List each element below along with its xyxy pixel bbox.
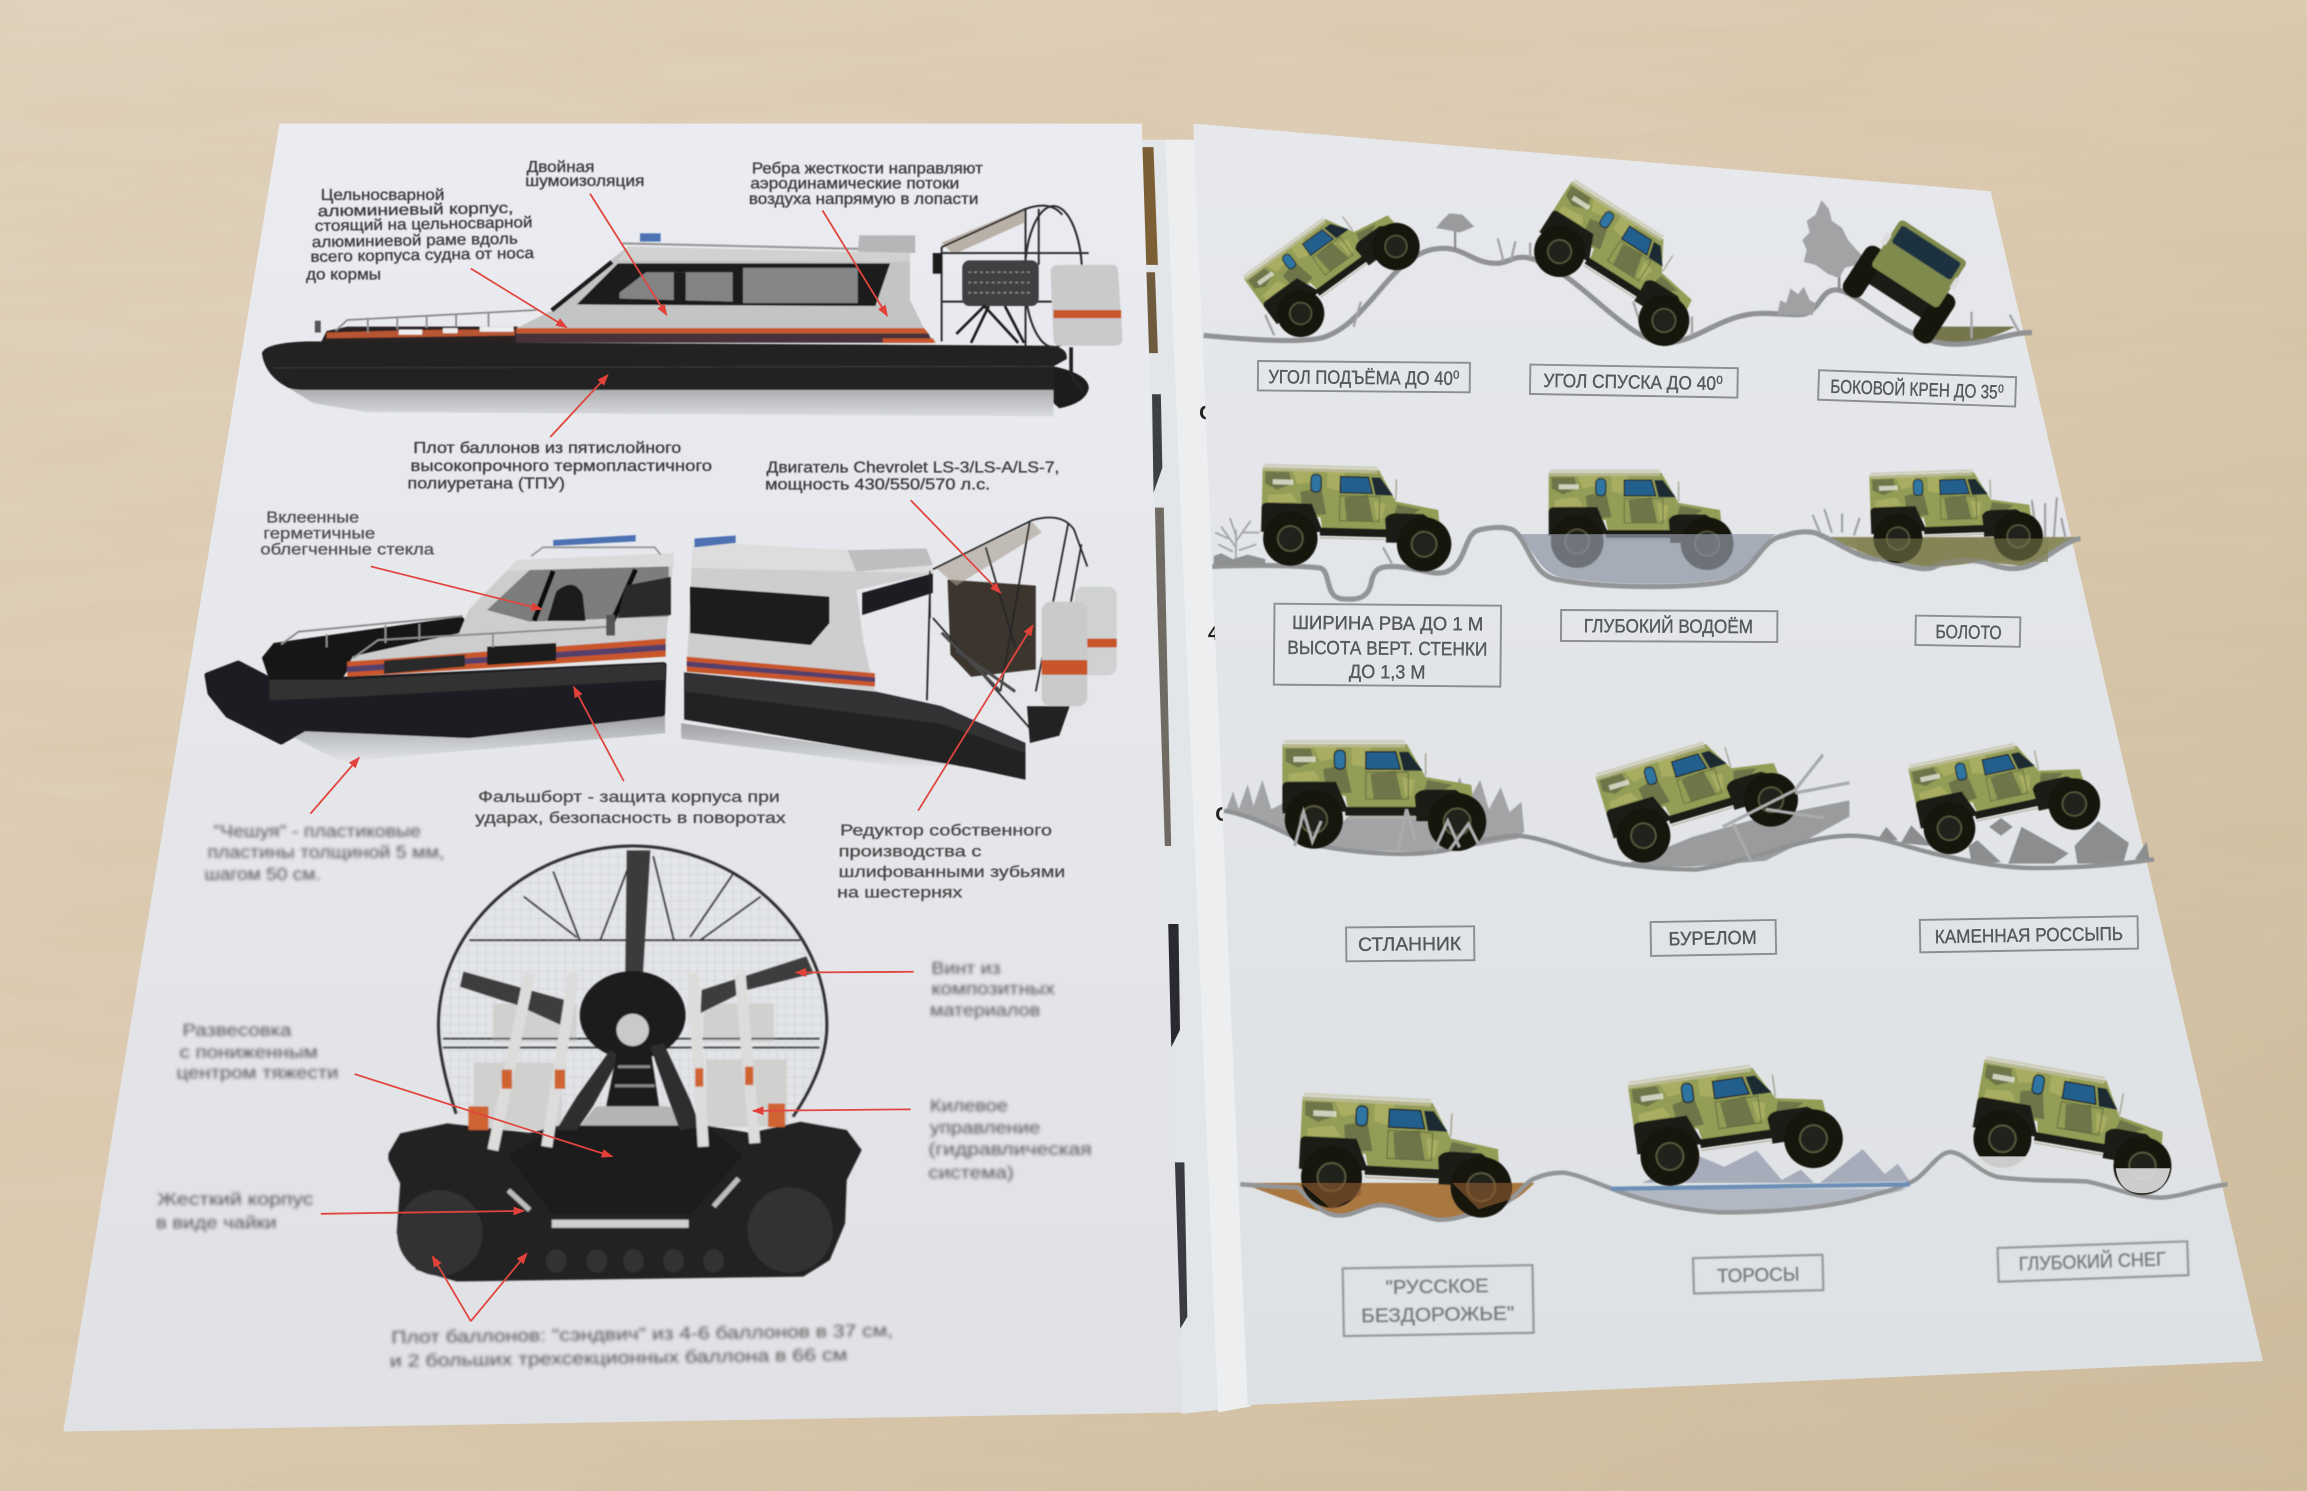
text: fin control: Килевое: [930, 1096, 1008, 1116]
label: russian off-road: БЕЗДОРОЖЬЕ": [1361, 1304, 1514, 1328]
boat 3: rear view with propeller: [388, 846, 862, 1281]
truck: side roll, front view: [1839, 211, 1979, 347]
text: engine: [765, 459, 1059, 493]
truck: climb: [1242, 180, 1429, 350]
icon: bare tree: [1215, 518, 1259, 562]
text: glass: облегченные стекла: [260, 542, 435, 559]
text: double insulation: [525, 159, 644, 190]
vegetation and branches over trucks: [1295, 755, 1849, 861]
icon: shrub: [1777, 287, 1816, 315]
text: welded hull: Цельносварной: [321, 187, 444, 204]
text: gunwale: Фальшборт - защита корпуса при: [478, 789, 780, 806]
label: russian off-road: "РУССКОЕ: [1386, 1276, 1489, 1299]
text: scales: [205, 821, 444, 884]
text: welded hull: стоящий на цельносварной: [315, 214, 533, 235]
row 2 terrain: ditch, pond, swamp: [1212, 497, 2080, 599]
truck: swamp: [1868, 468, 2044, 566]
label: ditch: ВЫСОТА ВЕРТ. СТЕНКИ: [1287, 638, 1488, 661]
text: float raft: полиуретана (ТПУ): [408, 475, 565, 492]
text: fin control: управление: [930, 1118, 1040, 1138]
text: gearbox: на шестернях: [837, 884, 963, 901]
label: rock field: [1920, 916, 2138, 952]
panel: left page (airboat): [63, 124, 1183, 1432]
truck: ditch: [1259, 465, 1453, 572]
text: fin control: [928, 1096, 1092, 1182]
text: low centre of gravity: [177, 1020, 338, 1082]
water overlay: [1518, 534, 1776, 584]
text: sandwich raft: и 2 больших трехсекционных баллона в 66 см: [390, 1344, 847, 1371]
text: gearbox: [837, 823, 1065, 901]
text: welded hull: [306, 187, 535, 284]
text: welded hull: алюминиевый корпус,: [318, 200, 514, 220]
truck: ice hummocks: [1626, 1054, 1847, 1193]
underlying brochure sheets: С: [1215, 803, 1230, 826]
text: composite propeller: материалов: [930, 1000, 1040, 1020]
text: engine: Двигатель Chevrolet LS-3/LS-A/LS-7,: [767, 459, 1059, 476]
label: swamp: БОЛОТО: [1935, 622, 2002, 644]
text: stiffening ribs: [749, 161, 983, 208]
text: double insulation: Двойная: [527, 159, 594, 176]
text: welded hull: всего корпуса судна от носа: [310, 245, 535, 266]
text: rigid hull: в виде чайки: [156, 1213, 277, 1233]
icon: small tree: [1436, 213, 1474, 250]
label: ditch: ШИРИНА РВА ДО 1 М: [1292, 613, 1483, 636]
text: composite propeller: [930, 958, 1055, 1020]
row 3 terrain: dwarf pine, windfall, rocks: [1224, 777, 2154, 870]
underlying brochure sheets: С: [1199, 401, 1214, 424]
label: dwarf pine: [1346, 926, 1474, 961]
swamp overlay: [1857, 538, 2048, 566]
label: deep snow: ГЛУБОКИЙ СНЕГ: [2018, 1249, 2166, 1276]
text: scales: "Чешуя" - пластиковые: [213, 821, 421, 841]
label: descent angle: [1530, 365, 1738, 398]
truck: deep snow: [1965, 1057, 2185, 1199]
text: stiffening ribs: воздуха напрямую в лопасти: [749, 191, 978, 208]
text: sandwich raft: Плот баллонов: "сэндвич" из 4-6 баллонов в 37 см,: [391, 1320, 893, 1347]
truck: russian off-road: [1295, 1094, 1516, 1219]
truck: rock field: [1906, 729, 2105, 862]
text: low centre of gravity: с пониженным: [180, 1042, 318, 1062]
truck: windfall: [1593, 721, 1805, 872]
label: deep water: [1561, 610, 1777, 642]
text: rigid hull: Жесткий корпус: [157, 1189, 314, 1209]
callout texts: rear view: [156, 821, 1092, 1371]
label: deep snow: [1998, 1241, 2188, 1282]
boat 2: perspective view, split: [207, 517, 1117, 780]
text: composite propeller: композитных: [931, 979, 1055, 999]
terrain labels: [1258, 361, 2188, 1336]
red callout arrows: [310, 194, 1033, 1321]
text: rigid hull: [156, 1189, 314, 1233]
text: composite propeller: Винт из: [931, 958, 1000, 978]
row 4 terrain: mud, ice, snow: [1240, 1149, 2228, 1220]
row 1 terrain: slopes: [1204, 200, 2032, 344]
underlying brochure sheets: 4: [1208, 622, 1220, 645]
text: sandwich raft: [390, 1320, 893, 1371]
text: fin control: (гидравлическая: [928, 1139, 1092, 1159]
label: climb angle: УГОЛ ПОДЪЁМА ДО 40⁰: [1268, 367, 1460, 390]
text: gearbox: шлифованными зубьями: [839, 864, 1065, 881]
underlying brochure sheets: [1142, 140, 1251, 1414]
label: russian off-road: [1343, 1265, 1534, 1336]
text: glass: Вклеенные: [266, 509, 359, 526]
label: descent angle: УГОЛ СПУСКА ДО 40⁰: [1543, 371, 1723, 395]
truck: dwarf pine: [1281, 742, 1486, 851]
label: rock field: КАМЕННАЯ РОССЫПЬ: [1935, 924, 2123, 948]
text: fin control: система): [928, 1162, 1014, 1182]
text: float raft: [408, 440, 712, 492]
text: stiffening ribs: Ребра жесткости направляют: [752, 161, 983, 178]
text: welded hull: до кормы: [306, 267, 381, 284]
label: swamp: [1915, 616, 2020, 647]
text: gearbox: Редуктор собственного: [840, 823, 1052, 840]
text: gunwale: [475, 789, 786, 827]
text: low centre of gravity: центром тяжести: [177, 1062, 338, 1082]
boat 1: side view: [262, 206, 1123, 416]
callout texts: upper boats: [260, 159, 1065, 901]
label: windfall: [1651, 920, 1776, 956]
text: engine: мощность 430/550/570 л.с.: [765, 476, 990, 493]
label: dwarf pine: СТЛАННИК: [1358, 934, 1462, 956]
label: climb angle: [1258, 361, 1470, 392]
text: scales: шагом 50 см.: [205, 864, 321, 884]
label: deep water: ГЛУБОКИЙ ВОДОЁМ: [1584, 615, 1753, 638]
label: ditch: ДО 1,3 М: [1349, 662, 1426, 684]
label: side roll: БОКОВОЙ КРЕН ДО 35⁰: [1830, 376, 2004, 404]
truck: pond: [1547, 471, 1734, 570]
text: glass: [260, 509, 435, 559]
text: float raft: Плот баллонов из пятислойного: [413, 440, 681, 457]
label: windfall: БУРЕЛОМ: [1668, 928, 1757, 950]
text: scales: пластины толщиной 5 мм,: [207, 842, 444, 862]
text: double insulation: шумоизоляция: [525, 173, 644, 190]
icon: large tree: [1802, 200, 1866, 290]
truck: descent: [1520, 179, 1723, 356]
text: low centre of gravity: Развесовка: [182, 1020, 292, 1040]
text: glass: герметичные: [263, 525, 375, 542]
label: ice hummocks: [1693, 1255, 1823, 1293]
mud and snow overlays: [1301, 1156, 2170, 1209]
text: gearbox: производства с: [839, 843, 982, 860]
text: welded hull: алюминиевой раме вдоль: [312, 231, 518, 251]
text: gunwale: ударах, безопасность в поворотах: [475, 810, 786, 827]
label: side roll: [1818, 370, 2016, 407]
label: ditch: [1274, 604, 1501, 687]
text: float raft: высокопрочного термопластичного: [411, 458, 712, 475]
text: stiffening ribs: аэродинамические потоки: [750, 175, 959, 192]
label: ice hummocks: ТОРОСЫ: [1717, 1264, 1800, 1288]
panel: right page (terrain types): [1193, 124, 2263, 1405]
